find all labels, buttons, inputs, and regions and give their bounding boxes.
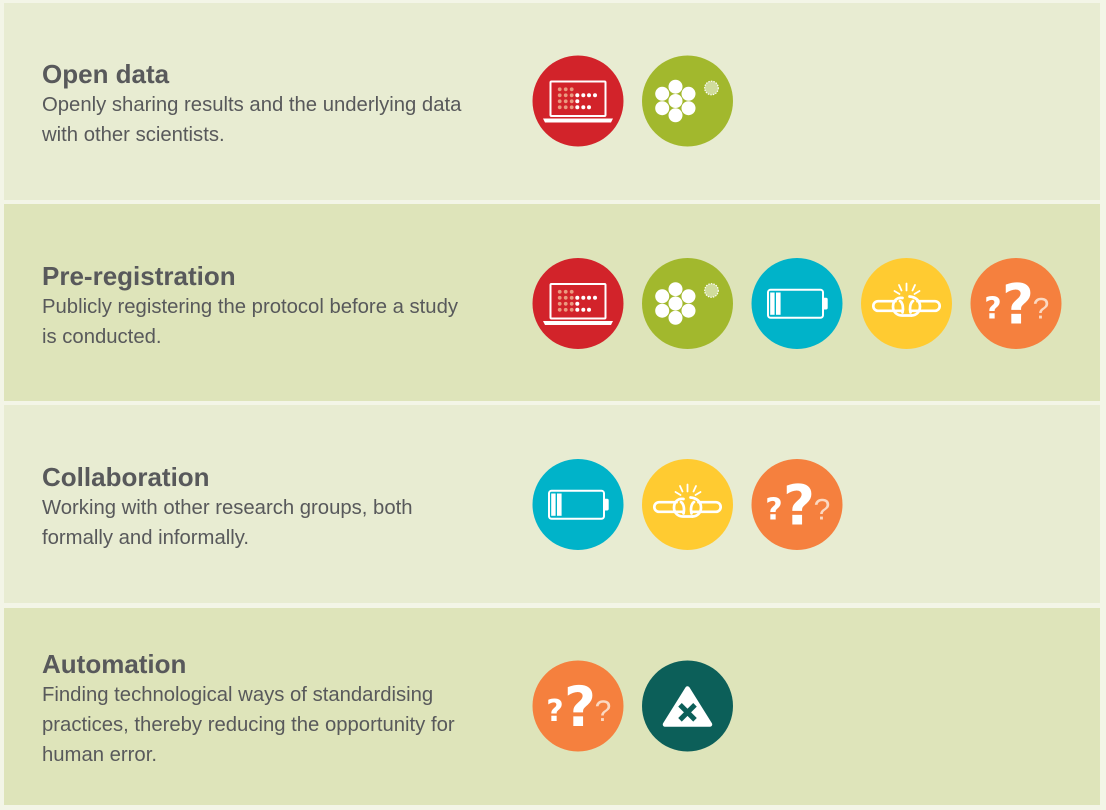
icon: question marks, collaboration row: ? (765, 492, 783, 528)
text block: open data (42, 59, 462, 146)
icon: laptop data, open data row (532, 56, 624, 146)
icon: question marks, automation row: ? (546, 694, 564, 729)
panel: collaboration background (4, 405, 1100, 603)
text block: automation: Finding technological ways of standardising (42, 684, 433, 706)
icon: warning triangle, automation row (642, 660, 733, 752)
text block: open data: with other scientists. (42, 124, 225, 146)
text block: automation: human error. (42, 744, 157, 766)
icon: question marks, pre-registration row: ? (1033, 292, 1049, 326)
icon: question marks, pre-registration row: ? (984, 292, 1002, 326)
text block: automation (42, 649, 455, 766)
icon: question marks, automation row: ? (595, 695, 611, 728)
icon: question marks, collaboration row (752, 459, 842, 550)
text block: open data: Open data (42, 59, 169, 89)
text block: collaboration (42, 462, 413, 549)
icon: question marks, automation row: ? (564, 675, 596, 739)
text block: automation: practices, thereby reducing the opportunity for (42, 714, 455, 736)
text block: collaboration: Collaboration (42, 462, 210, 492)
icon: low battery, pre-registration row (752, 258, 842, 349)
icon: cell cluster, open data row (642, 56, 733, 146)
text block: automation: Automation (42, 649, 186, 679)
text block: pre-registration: Pre-registration (42, 261, 236, 291)
icon: broken chain, collaboration row (642, 459, 733, 550)
icon: question marks, pre-registration row: ? (1002, 272, 1034, 336)
text block: collaboration: Working with other research groups, both (42, 497, 413, 519)
panel: automation background (4, 608, 1100, 805)
text block: open data: Openly sharing results and the underlying data (42, 94, 461, 116)
icon: low battery, collaboration row (532, 459, 624, 550)
icon: cell cluster, pre-registration row (642, 258, 733, 349)
text block: pre-registration: Publicly registering the protocol before a study (42, 296, 458, 318)
text block: pre-registration: is conducted. (42, 326, 162, 348)
icon: laptop data, pre-registration row (532, 258, 624, 349)
panel: open data background (4, 3, 1100, 200)
icon: broken chain, pre-registration row (861, 258, 952, 349)
panel: pre-registration background (4, 204, 1100, 401)
icon: question marks, collaboration row: ? (783, 474, 815, 538)
icon: question marks, automation row (532, 660, 624, 752)
icon: question marks, collaboration row: ? (814, 494, 830, 526)
text block: pre-registration (42, 261, 458, 348)
text block: collaboration: formally and informally. (42, 527, 249, 549)
icon: question marks, pre-registration row (970, 258, 1062, 349)
